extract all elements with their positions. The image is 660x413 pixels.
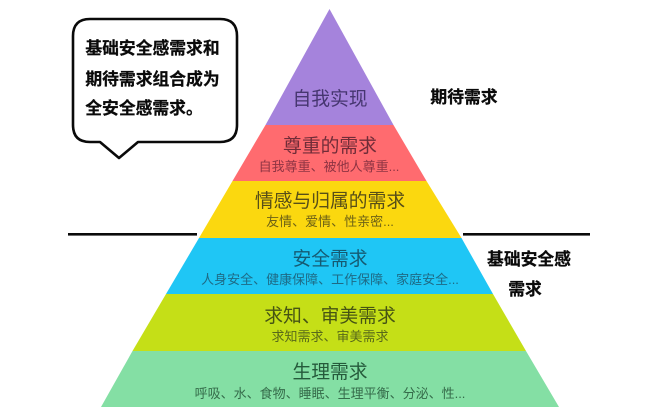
divider line right	[463, 233, 590, 236]
panel: safety tier: 安全需求	[292, 248, 368, 269]
panel: cognitive and aesthetic tier	[132, 294, 526, 351]
panel: esteem tier: 自我尊重、被他人尊重...	[259, 159, 399, 174]
panel: cognitive and aesthetic tier: 求知需求、审美需求	[271, 329, 389, 344]
panel: belonging tier: 友情、爱情、性亲密...	[266, 214, 394, 229]
panel: physiological tier: 呼吸、水、食物、睡眠、生理平衡、分泌、性...	[195, 386, 465, 401]
callout: speech bubble: 基础安全感需求和	[85, 38, 220, 58]
label: basic security needs: 需求	[508, 280, 542, 299]
panel: cognitive and aesthetic tier: 求知、审美需求	[264, 305, 396, 326]
panel: self-actualization tier	[266, 9, 394, 125]
callout: speech bubble: 期待需求组合成为	[85, 69, 220, 89]
divider line left	[68, 233, 197, 236]
callout: speech bubble	[73, 19, 237, 158]
label: basic security needs	[487, 249, 571, 299]
panel: safety tier	[166, 238, 493, 294]
panel: self-actualization tier: 自我实现	[292, 88, 368, 109]
panel: belonging tier: 情感与归属的需求	[255, 190, 405, 211]
label: basic security needs: 基础安全感	[487, 249, 571, 269]
panel: safety tier: 人身安全、健康保障、工作保障、家庭安全...	[201, 272, 459, 287]
panel: esteem tier: 尊重的需求	[283, 135, 377, 156]
panel: belonging tier	[199, 181, 462, 238]
label: expectation needs: 期待需求	[430, 88, 498, 107]
panel: esteem tier	[232, 125, 426, 181]
panel: physiological tier	[101, 351, 559, 407]
callout: speech bubble: 全安全感需求。	[85, 98, 203, 118]
panel: physiological tier: 生理需求	[292, 361, 368, 382]
